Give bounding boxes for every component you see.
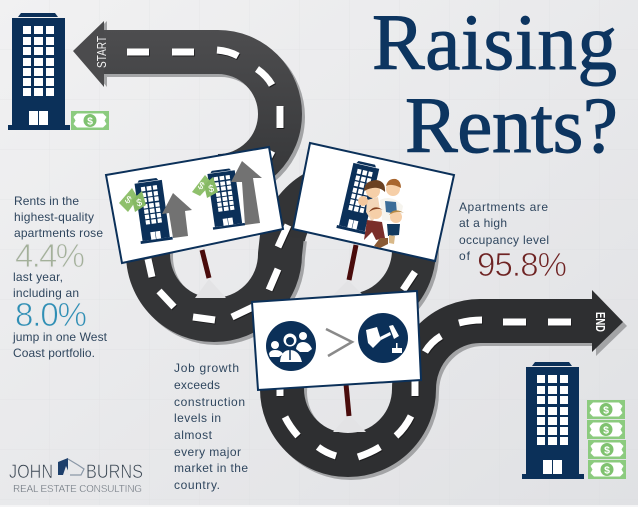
title	[372, 0, 618, 170]
text block: rents rising: last year,	[13, 270, 63, 284]
icon: family	[358, 179, 404, 248]
icon: building at start with one bill	[8, 13, 109, 130]
icon: building with large arrow	[205, 161, 262, 230]
sign posts	[195, 245, 366, 432]
text block: job growth: exceeds	[174, 378, 220, 392]
stat: 4.4%: 4.4%	[15, 237, 85, 274]
icon: price tags: $	[123, 194, 133, 207]
road dashes	[127, 50, 571, 457]
START label: START	[95, 36, 109, 68]
icon: building at end with stack of bills: $	[603, 404, 609, 416]
road: lower left loop	[148, 176, 285, 323]
icon: building at end with stack of bills: $	[604, 444, 610, 456]
road dash shadows	[128, 51, 572, 458]
logo	[9, 458, 143, 495]
text block: rents rising: apartments rose	[14, 226, 103, 240]
logo: REAL ESTATE CONSULTING	[13, 484, 142, 495]
icon: construction hammer circle	[358, 313, 408, 363]
text block: rents rising: Coast portfolio.	[13, 346, 95, 360]
text block: job growth: market in the	[174, 461, 248, 475]
text block: occupancy: at a high	[459, 216, 507, 230]
text block: occupancy	[459, 200, 567, 283]
text block: job growth: Job growth	[174, 361, 239, 375]
icon: building at start with one bill: $	[87, 116, 93, 128]
panel: rent increase sign	[106, 147, 283, 263]
icon: price tags: $	[136, 198, 143, 209]
icon: building at end with stack of bills: $	[603, 424, 609, 436]
logo: BURNS	[86, 462, 143, 483]
winding road	[73, 21, 627, 458]
icon: building at end with stack of bills: $	[604, 464, 610, 476]
text block: job growth: almost	[174, 428, 213, 442]
logo: JOHN	[9, 462, 53, 483]
icon: price tags: $	[208, 184, 215, 195]
title: Raising	[372, 0, 617, 87]
road: final section with END arrow	[282, 290, 627, 458]
icon: price tags	[192, 175, 218, 198]
text block: rents rising	[12, 194, 108, 360]
text block: rents rising: including an	[13, 286, 79, 300]
icon: logo mark	[58, 458, 84, 475]
text block: job growth: construction	[174, 395, 245, 409]
text block: occupancy: Apartments are	[459, 200, 548, 214]
text block: rents rising: highest-quality	[14, 210, 94, 224]
text block: job growth: levels in	[174, 411, 221, 425]
text block: rents rising: jump in one West	[12, 330, 108, 344]
road: middle loop	[282, 184, 417, 325]
icon: building at end with stack of bills	[522, 362, 626, 479]
icon: tilted building	[336, 159, 382, 235]
stat: 95.8%: 95.8%	[477, 246, 567, 283]
greater than symbol	[326, 329, 352, 356]
text block: job growth: every major	[174, 445, 241, 459]
text block: occupancy: occupancy level	[459, 233, 549, 247]
road: top section with START arrow	[73, 21, 283, 179]
text block: rents rising: Rents in the	[14, 194, 79, 208]
text block: job growth: country.	[174, 478, 220, 492]
END label: END	[593, 312, 607, 332]
panel: occupancy sign	[293, 143, 454, 261]
icon: building with small arrow	[132, 177, 192, 244]
icon: price tags: $	[196, 180, 206, 193]
icon: price tags	[119, 188, 146, 212]
text block: job growth	[174, 361, 248, 492]
icon: people circle	[266, 321, 316, 371]
panel: job growth vs construction sign	[252, 291, 421, 390]
text block: occupancy: of	[459, 249, 471, 263]
title: Rents?	[405, 83, 618, 170]
stat: 8.0%: 8.0%	[15, 296, 87, 333]
